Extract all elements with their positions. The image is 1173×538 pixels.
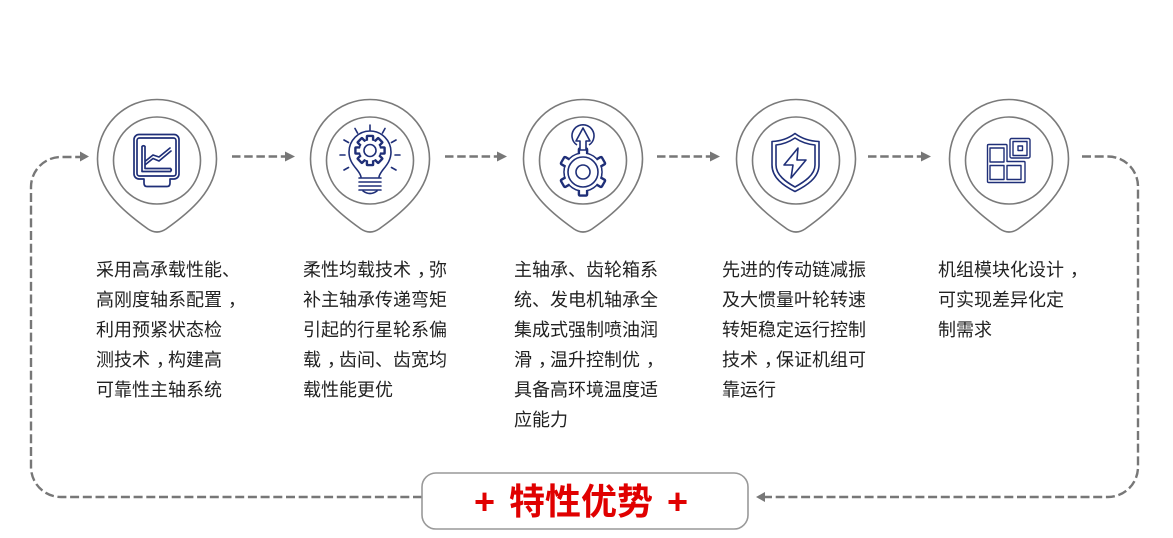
text: step 5 description: 制需求 [938, 320, 992, 340]
text: step 2 description: 补主轴承传递弯矩 [303, 290, 447, 310]
title: feature advantages: + [667, 481, 688, 522]
text: step 1 description: 利用预紧状态检 [96, 320, 222, 340]
text: step 4 description: 靠运行 [722, 380, 776, 400]
arrow: step 4 to step 5 [868, 152, 931, 162]
text: step 2 description: 载性能更优 [303, 380, 393, 400]
text: step 1 description: 可靠性主轴系统 [96, 380, 222, 400]
text: step 1 description: 采用高承载性能、 [96, 260, 240, 280]
text: step 3 description: 具备高环境温度适 [514, 380, 658, 400]
text: step 3 description: 滑 ，温升控制优 ， [514, 350, 664, 370]
connector: loop from last step down to title box [756, 156, 1138, 502]
text: step 2 description [303, 260, 447, 400]
text: step 4 description: 技术 ，保证机组可 [722, 350, 866, 370]
text: step 4 description: 先进的传动链减振 [722, 260, 866, 280]
text: step 4 description: 转矩稳定运行控制 [722, 320, 866, 340]
pin: step 1 [98, 100, 216, 232]
pin: step 3 [524, 100, 642, 232]
text: step 2 description: 载 ，齿间、齿宽均 [303, 350, 447, 370]
title: feature advantages: 特性优势 [509, 481, 653, 522]
pin: step 5 [950, 100, 1068, 232]
arrow: step 1 to step 2 [232, 152, 295, 162]
arrow: step 3 to step 4 [657, 152, 720, 162]
connector: loop from title box up to first step [31, 152, 422, 497]
text: step 1 description [96, 260, 246, 400]
text: step 3 description: 应能力 [514, 410, 568, 430]
text: step 2 description: 柔性均载技术 ，弥 [303, 260, 447, 280]
text: step 3 description [514, 260, 664, 430]
icon: chart monitor [134, 134, 179, 186]
text: step 1 description: 高刚度轴系配置 ， [96, 290, 246, 310]
icon: modular tiles [988, 138, 1030, 182]
title box outline [422, 473, 748, 529]
text: step 4 description: 及大惯量叶轮转速 [722, 290, 866, 310]
title: feature advantages [474, 481, 688, 522]
text: step 5 description [938, 260, 1088, 340]
arrow: step 2 to step 3 [445, 152, 507, 162]
text: step 5 description: 可实现差异化定 [938, 290, 1064, 310]
icon: light bulb with gear [340, 125, 400, 194]
text: step 1 description: 测技术 ，构建高 [96, 350, 222, 370]
text: step 3 description: 主轴承、齿轮箱系 [514, 260, 658, 280]
pin: step 2 [310, 100, 430, 232]
icon: shield with lightning bolt [772, 134, 819, 192]
title: feature advantages: + [474, 481, 495, 522]
text: step 2 description: 引起的行星轮系偏 [303, 320, 447, 340]
text: step 3 description: 统、发电机轴承全 [514, 290, 658, 310]
text: step 4 description [722, 260, 866, 400]
text: step 3 description: 集成式强制喷油润 [514, 320, 658, 340]
pin: step 4 [736, 100, 856, 232]
text: step 5 description: 机组模块化设计 ， [938, 260, 1088, 280]
icon: gear with up arrow [560, 125, 606, 196]
